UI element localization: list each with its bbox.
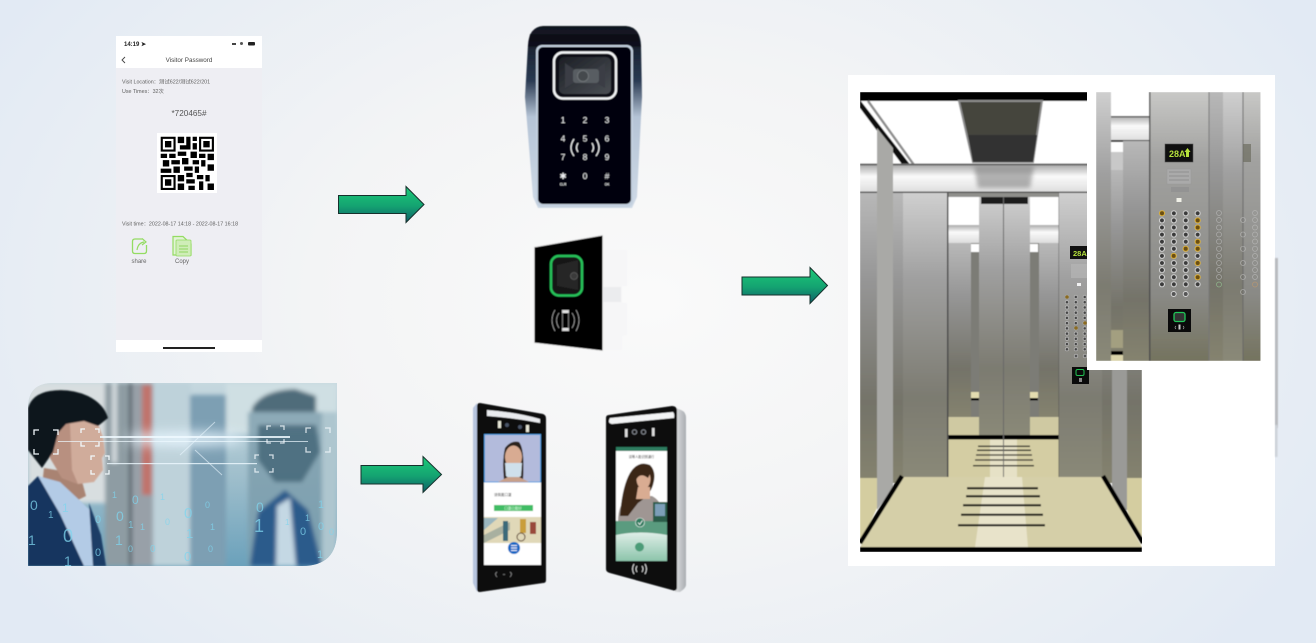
binary data overlay: 0 (184, 549, 191, 564)
phone header bar: Visitor Password (166, 57, 213, 64)
inset background walls (1096, 92, 1261, 361)
keypad: 3 (605, 115, 610, 125)
keypad: 0 (583, 171, 588, 181)
phone footer bar (116, 340, 262, 352)
binary data overlay: 0 (318, 521, 324, 533)
visit location text: Visit Location：测试622/测试622/201 (122, 78, 210, 86)
screen: 口罩已戴好 (504, 506, 522, 510)
binary data overlay: 1 (210, 522, 215, 532)
binary data overlay: 1 (112, 490, 117, 500)
QR reader on panel (1168, 309, 1191, 332)
binary data overlay: 1 (317, 549, 323, 561)
binary data overlay: 0 (208, 544, 213, 554)
arrow: face recognition to terminals (361, 456, 442, 492)
icon: copy (173, 236, 191, 256)
left wall (860, 128, 948, 545)
binary data overlay: 0 (132, 493, 139, 507)
panel: visitor password phone screen (116, 36, 262, 352)
binary data overlay: 0 (116, 508, 124, 524)
binary data overlay: 1 (48, 510, 54, 521)
white cover behind inset (1087, 75, 1275, 370)
binary data overlay: 0 (30, 497, 38, 513)
binary data overlay: 0 (300, 526, 306, 538)
binary data overlay: 1 (160, 492, 165, 502)
keypad: 6 (605, 134, 610, 144)
man in suit (28, 390, 108, 566)
sensors (498, 421, 529, 432)
blue menu button (508, 542, 520, 554)
instruction plate (1167, 169, 1191, 202)
sensors (625, 428, 654, 437)
binary data overlay: 0 (184, 505, 192, 522)
binary data overlay: 1 (140, 522, 145, 532)
green ring camera (551, 256, 582, 296)
visit time text: Visit time：2022-08-17 14:18 - 2022-08-17 16:18 (122, 222, 238, 228)
binary data overlay: 1 (128, 520, 134, 531)
keypad: 2 (583, 115, 588, 125)
binary data overlay: 1 (64, 553, 72, 569)
binary data overlay: 1 (285, 518, 290, 527)
floor display: 28A (1169, 149, 1186, 159)
binary data overlay: 0 (128, 544, 133, 554)
binary data overlay: 0 (165, 517, 170, 527)
panel: elevator white card (848, 75, 1275, 566)
device: QR and face recognition terminal (606, 406, 686, 592)
arrow: readers to elevator (742, 268, 828, 304)
right wall (1059, 193, 1142, 545)
binary data overlay: 1 (115, 532, 123, 548)
binary data overlay: 1 (318, 499, 324, 511)
rear mirror and door (947, 193, 1060, 477)
keypad: 7 (561, 152, 566, 162)
keypad: CLR (560, 182, 567, 186)
keypad: 4 (561, 134, 566, 144)
keypad: OK (605, 182, 610, 186)
binary data overlay: 1 (186, 526, 193, 541)
device: wall mounted QR reader (534, 235, 627, 351)
binary data overlay: 0 (63, 526, 73, 546)
panel: elevator control panel close-up (1096, 92, 1261, 361)
binary data overlay: 0 (150, 544, 156, 555)
keypad: # (605, 171, 610, 181)
arrow: phone to readers (338, 186, 424, 222)
share label: share (131, 259, 147, 265)
copy label: Copy (175, 259, 189, 265)
screen (616, 447, 667, 561)
phone header bar (116, 36, 262, 68)
keypad: 8 (583, 152, 588, 162)
binary data overlay: 1 (305, 513, 310, 523)
NFC waves (571, 139, 599, 156)
screen: 请佩戴口罩 (494, 492, 512, 497)
face scan brackets (34, 426, 330, 474)
binary data overlay: 0 (256, 499, 264, 515)
floor display (1165, 144, 1193, 162)
keypad: ✱ (559, 171, 567, 181)
elevator button panel (1065, 264, 1087, 358)
binary data overlay: 0 (329, 527, 334, 537)
device: mask detection terminal (473, 403, 546, 592)
elevator QR reader (1072, 367, 1089, 384)
NFC area (632, 564, 646, 574)
binary data overlay: 0 (205, 500, 210, 510)
panel: face recognition photo (28, 383, 337, 569)
keypad (559, 115, 610, 186)
keypad: 1 (561, 115, 566, 125)
floor (860, 476, 1143, 552)
binary data overlay: 0 (95, 514, 101, 526)
NFC mark (552, 310, 579, 331)
screen: 请等人脸识别通行 (629, 454, 655, 459)
camera with light ring (554, 52, 616, 98)
photo background columns (28, 383, 337, 566)
binary data overlay: 1 (254, 516, 264, 536)
ceiling (860, 92, 1087, 194)
NFC area (496, 572, 512, 577)
floor buttons (1159, 210, 1201, 297)
binary data overlay: 1 (28, 532, 36, 548)
keypad: 9 (605, 152, 610, 162)
elevator wall display: 28A (1073, 249, 1087, 258)
password code: *720465# (171, 109, 207, 118)
binary data overlay: 1 (62, 501, 69, 515)
QR code (157, 133, 217, 193)
elevator wall display (1070, 246, 1087, 259)
keypad: 5 (583, 134, 588, 144)
device: keypad access reader (525, 26, 642, 208)
icon: share (132, 238, 146, 254)
top light bar (487, 410, 540, 423)
phone header bar: 14:19 ➤ (124, 41, 147, 48)
reflected panel on right wall (1216, 144, 1258, 294)
top light bar (609, 412, 674, 424)
elevator interior (860, 92, 1143, 552)
binary data overlay: 0 (95, 547, 101, 559)
use times text: Use Times：32次 (122, 87, 165, 95)
screen (484, 434, 541, 565)
card edge shadow (1275, 258, 1278, 457)
scan light beams (58, 422, 308, 475)
binary data overlay (28, 490, 334, 569)
